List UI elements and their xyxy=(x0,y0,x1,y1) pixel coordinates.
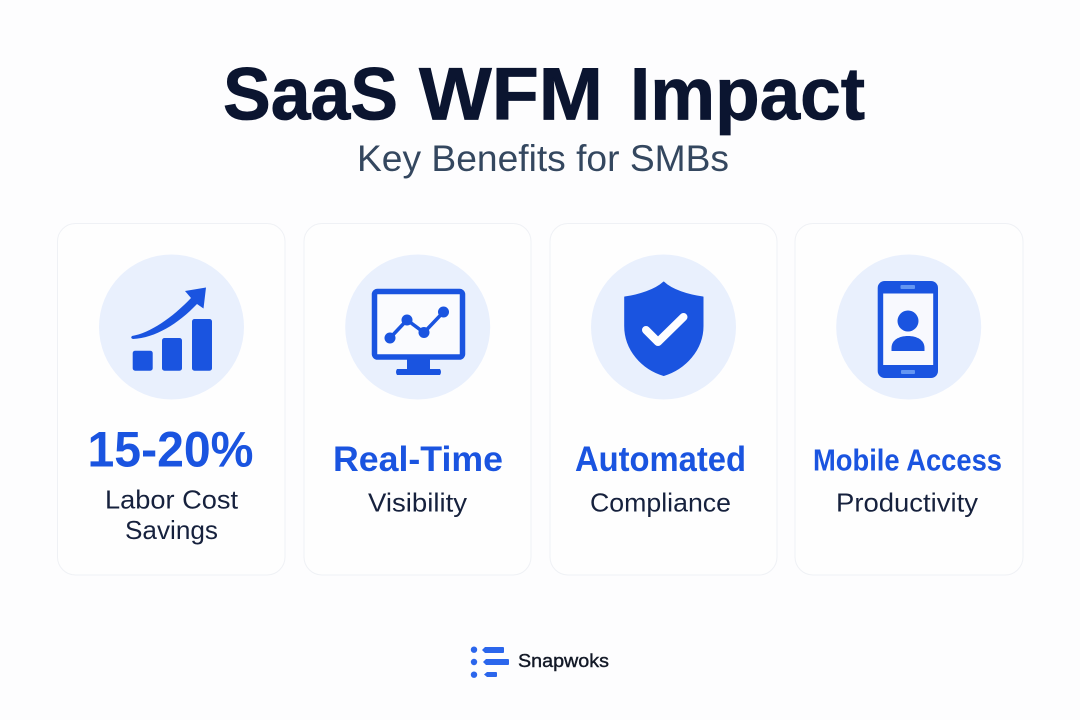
icon: monitor with line chart xyxy=(345,254,490,400)
heading: real-time: Real-Time xyxy=(333,440,503,479)
icon: logo list mark xyxy=(471,646,509,678)
title: Impact xyxy=(630,52,865,136)
title xyxy=(223,52,865,136)
label: labor cost savings: Labor Cost xyxy=(105,484,239,514)
label: visibility: Visibility xyxy=(368,488,467,518)
panel: labor cost savings xyxy=(58,224,285,575)
title: WFM xyxy=(419,52,603,136)
heading: automated: Automated xyxy=(575,440,746,479)
icon: phone with person xyxy=(836,254,981,400)
label: compliance: Compliance xyxy=(590,488,731,518)
icon: shield with check xyxy=(591,254,736,400)
panel: automated compliance xyxy=(550,224,777,575)
icon: rising bar chart xyxy=(99,254,244,400)
logo: Snapwoks xyxy=(471,646,609,678)
wordmark: Snapwoks xyxy=(518,650,609,671)
label: productivity: Productivity xyxy=(836,488,978,518)
label: labor cost savings: Savings xyxy=(125,515,218,545)
panel: mobile access productivity xyxy=(795,224,1023,575)
panel: real-time visibility xyxy=(304,224,531,575)
title: SaaS xyxy=(223,52,398,136)
label: labor cost savings xyxy=(105,484,239,545)
stat: 15-20%: 15-20% xyxy=(88,422,254,478)
subtitle: Key Benefits for SMBs xyxy=(357,138,729,179)
heading: mobile access: Mobile Access xyxy=(813,442,1002,478)
